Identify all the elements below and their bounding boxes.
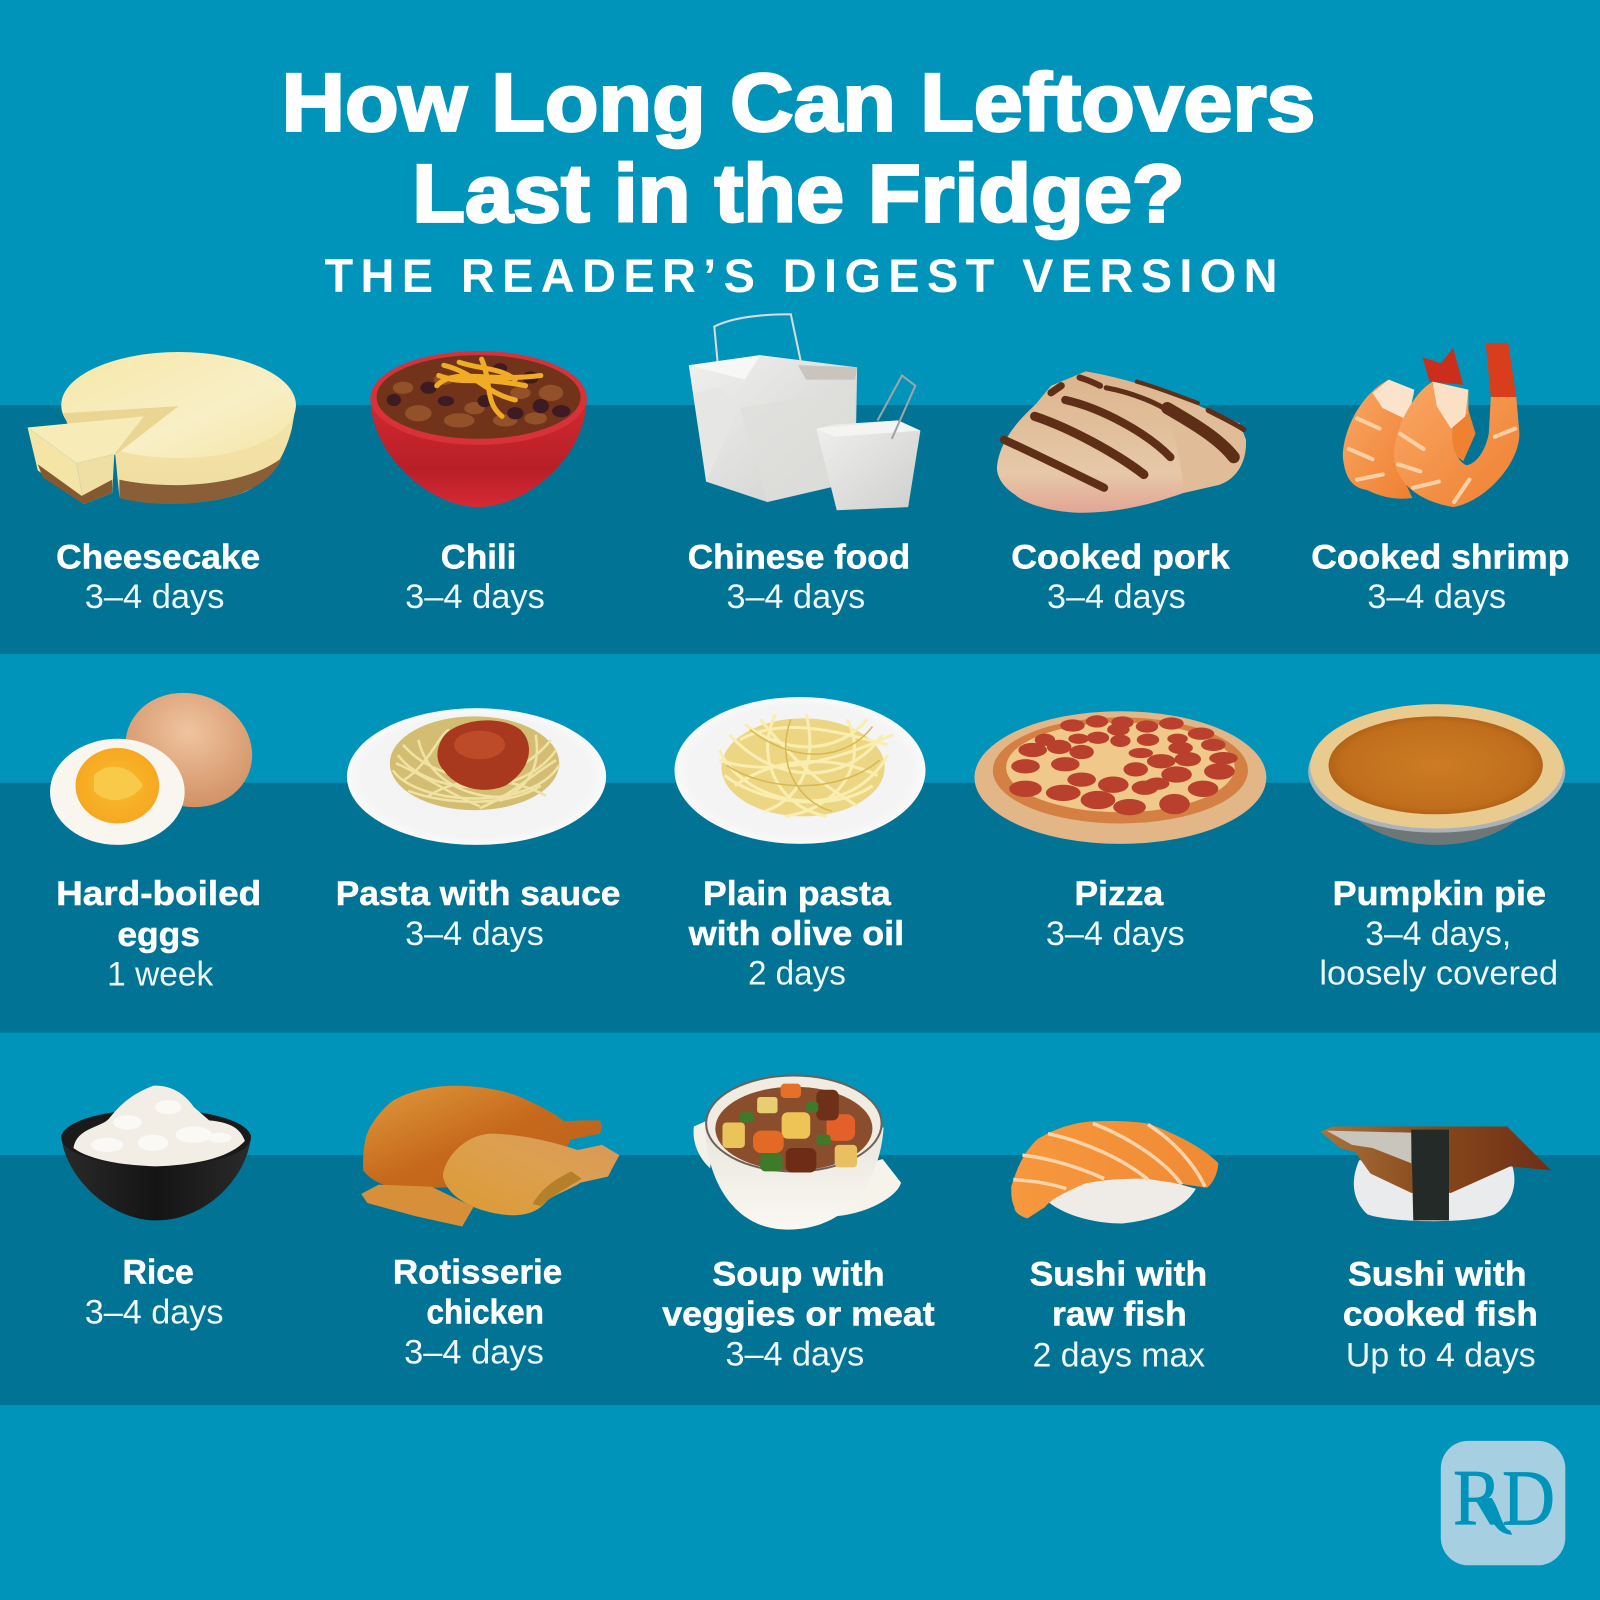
label: Sushi with raw fish: raw fish: [1052, 1296, 1187, 1334]
label: Sushi with raw fish: 2 days max: [1033, 1336, 1205, 1374]
label: Chinese food: 3–4 days: [727, 578, 865, 616]
label: Plain pasta with olive oil: [688, 875, 904, 993]
label: Pasta with sauce: 3–4 days: [405, 915, 544, 953]
label: Sushi with raw fish: Sushi with: [1030, 1256, 1207, 1294]
icon: chili bowl: [370, 351, 587, 507]
item: Plain pasta with olive oil: [674, 697, 926, 993]
logo: RD: RD: [1453, 1454, 1555, 1542]
label: Soup with veggies or meat: [662, 1256, 935, 1373]
label: Cooked pork: [1011, 538, 1230, 616]
item: Pumpkin pie: [1308, 704, 1565, 993]
icon: takeout boxes: [689, 314, 920, 510]
label: Cheesecake: Cheesecake: [56, 538, 260, 576]
label: Pumpkin pie: loosely covered: [1319, 955, 1558, 993]
label: Plain pasta with olive oil: Plain pasta: [703, 875, 892, 913]
band: row 1: [0, 405, 1600, 654]
icon: shrimp: [1343, 343, 1519, 507]
label: Rice: 3–4 days: [85, 1293, 223, 1331]
label: Hard-boiled eggs: eggs: [117, 916, 200, 954]
icon: roast chicken: [361, 1086, 619, 1227]
icon: pumpkin pie: [1308, 704, 1565, 845]
item: Hard-boiled eggs: [50, 675, 268, 994]
label: Plain pasta with olive oil: 2 days: [748, 955, 846, 993]
label: Rotisserie chicken: Rotisserie: [393, 1254, 562, 1292]
icon: cheesecake: [28, 352, 296, 504]
label: Cheesecake: [56, 538, 260, 616]
label: Chili: [405, 538, 545, 616]
item: Chinese food: [688, 314, 920, 616]
label: Sushi with cooked fish: [1343, 1256, 1538, 1374]
label: Cooked pork: Cooked pork: [1011, 538, 1230, 576]
label: Rotisserie chicken: [393, 1254, 562, 1371]
label: Hard-boiled eggs: Hard-boiled: [56, 875, 261, 913]
label: Cooked shrimp: [1311, 538, 1569, 616]
label: Chinese food: Chinese food: [688, 538, 910, 576]
label: Rotisserie chicken: 3–4 days: [404, 1333, 544, 1371]
item: Pizza: [974, 711, 1266, 953]
item: Pasta with sauce: [336, 708, 620, 953]
label: Pumpkin pie: [1319, 875, 1558, 993]
label: Chili: 3–4 days: [405, 578, 545, 616]
icon: soup pot: [694, 1074, 901, 1230]
band: row 3: [0, 1155, 1600, 1405]
icon: salmon nigiri: [1011, 1121, 1218, 1223]
label: Sushi with cooked fish: Up to 4 days: [1346, 1336, 1536, 1374]
label: Pumpkin pie: 3–4 days,: [1365, 915, 1511, 953]
label: Plain pasta with olive oil: with olive oil: [688, 915, 904, 953]
icon: eel nigiri: [1320, 1127, 1551, 1221]
item: Cooked pork: [997, 371, 1246, 616]
label: Sushi with cooked fish: cooked fish: [1343, 1296, 1538, 1334]
icon: eggs: [50, 675, 268, 845]
item: Sushi with raw fish: [1011, 1121, 1218, 1374]
item: Cooked shrimp: [1311, 343, 1569, 616]
label: Soup with veggies or meat: 3–4 days: [726, 1335, 864, 1373]
item: Sushi with cooked fish: [1320, 1127, 1551, 1374]
label: Sushi with raw fish: [1030, 1256, 1207, 1374]
label: Soup with veggies or meat: Soup with: [712, 1256, 885, 1294]
icon: spaghetti with sauce: [347, 708, 606, 845]
icon: plain pasta: [674, 697, 926, 844]
subtitle: THE READER’S DIGEST VERSION: [324, 250, 1278, 302]
label: Rice: Rice: [122, 1254, 194, 1292]
icon: rice bowl: [61, 1086, 251, 1220]
label: Rice: [85, 1254, 223, 1331]
label: Rotisserie chicken: chicken: [427, 1293, 544, 1331]
label: Cheesecake: 3–4 days: [85, 578, 224, 616]
label: Chili: Chili: [441, 538, 516, 576]
title: Last in the Fridge?: [412, 148, 1185, 239]
icon: pepperoni pizza: [974, 711, 1266, 844]
label: Pasta with sauce: Pasta with sauce: [336, 875, 620, 913]
label: Pizza: Pizza: [1074, 875, 1164, 913]
title: [282, 58, 1315, 239]
label: Cooked pork: 3–4 days: [1047, 578, 1186, 616]
logo: RD: [1441, 1441, 1565, 1565]
title: How Long Can Leftovers: [282, 58, 1315, 149]
icon: grilled pork: [997, 371, 1246, 513]
label: Pizza: 3–4 days: [1046, 915, 1185, 953]
label: Hard-boiled eggs: [56, 875, 261, 994]
label: Pizza: [1046, 875, 1185, 953]
item: Soup: [662, 1074, 935, 1373]
item: Rice: [61, 1086, 251, 1331]
label: Cooked shrimp: Cooked shrimp: [1311, 538, 1569, 576]
item: Cheesecake: [28, 352, 296, 616]
band: row 2: [0, 783, 1600, 1033]
label: Sushi with cooked fish: Sushi with: [1348, 1256, 1527, 1294]
label: Hard-boiled eggs: 1 week: [107, 956, 214, 994]
label: Cooked shrimp: 3–4 days: [1367, 578, 1506, 616]
label: Pasta with sauce: [336, 875, 620, 953]
label: Soup with veggies or meat: veggies or meat: [662, 1296, 935, 1334]
label: Pumpkin pie: Pumpkin pie: [1333, 875, 1546, 913]
label: Chinese food: [688, 538, 910, 616]
item: Rotisserie chicken: [361, 1086, 619, 1371]
item: Chili: [370, 351, 587, 616]
